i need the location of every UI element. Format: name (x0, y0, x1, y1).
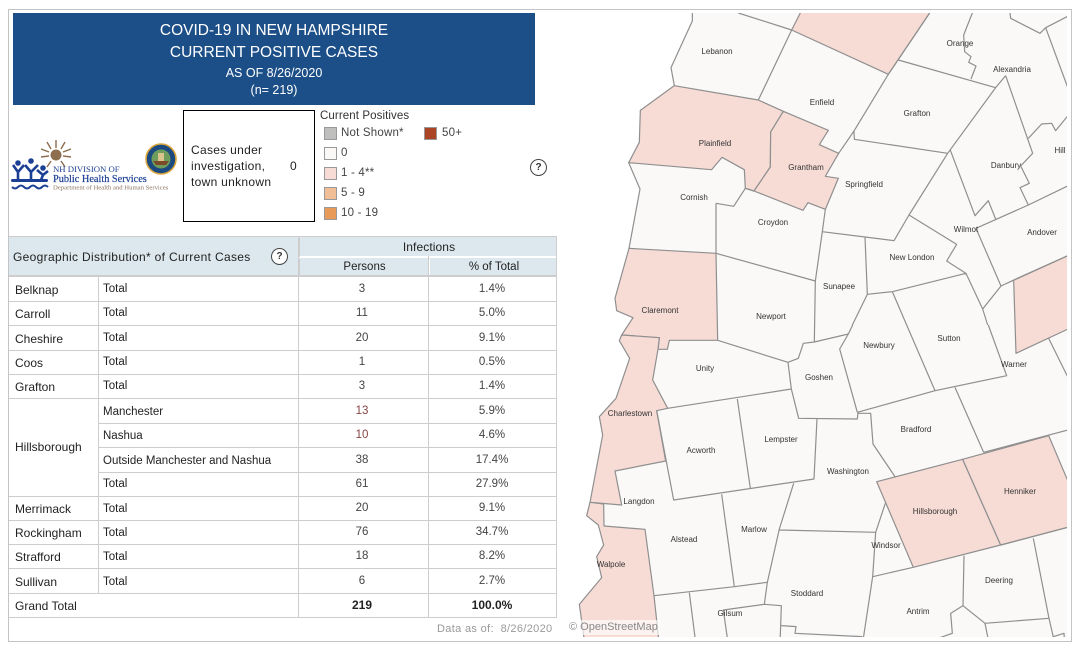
town labels: Andover (1027, 228, 1057, 237)
row: Cheshire (9, 326, 557, 351)
legend: current positives (320, 110, 462, 220)
town labels: Henniker (1004, 487, 1036, 496)
help icon: legend: ? (535, 162, 542, 173)
row: Grafton: Total (103, 380, 127, 392)
row: Grand Total (9, 593, 557, 618)
table header: ? (276, 251, 283, 262)
row: Merrimack: Total (103, 503, 127, 515)
title banner: COVID-19 IN NEW HAMPSHIRE (160, 22, 388, 39)
town labels: Grafton (904, 109, 930, 118)
row: Belknap: Total (103, 283, 127, 295)
town labels: Goshen (805, 373, 833, 382)
row: Cheshire: Cheshire (15, 332, 63, 346)
legend: current positives: 10 - 19 (341, 207, 378, 219)
row: Sullivan (9, 569, 557, 594)
row: Carroll: 5.0% (479, 307, 505, 319)
row: Grand Total: 100.0% (472, 598, 512, 612)
cases under investigation box: 0 (290, 159, 297, 173)
row: Sullivan: Total (103, 576, 127, 588)
town labels: Washington (827, 467, 869, 476)
row: Strafford (9, 544, 557, 569)
row group: Hillsborough (9, 405, 556, 497)
row: Coos: Coos (15, 356, 43, 370)
help icon: legend (530, 159, 547, 176)
town labels: Grantham (788, 163, 824, 172)
town labels: Claremont (642, 306, 679, 315)
legend: current positives: 1 - 4** (341, 167, 374, 179)
row: Rockingham (9, 520, 557, 545)
row: Strafford: 18 (356, 550, 368, 562)
town labels: Alexandria (993, 65, 1031, 74)
logo: NH Division of Public Health Services: Public Health Services (53, 174, 147, 185)
town polygons (579, 5, 1080, 650)
town labels: Deering (985, 576, 1013, 585)
row: Belknap: Belknap (15, 283, 58, 297)
town labels: Walpole (597, 560, 626, 569)
town labels: Antrim (906, 607, 930, 616)
legend: current positives: 0 (341, 147, 348, 159)
row: Rockingham: 34.7% (476, 526, 508, 538)
town labels: Acworth (687, 446, 715, 455)
row: Sullivan: 2.7% (479, 575, 505, 587)
cases under investigation box: town unknown (191, 175, 271, 189)
row group: Hillsborough: Nashua (103, 430, 143, 442)
row: Cheshire: 9.1% (479, 332, 505, 344)
title banner: CURRENT POSITIVE CASES (170, 44, 378, 61)
town labels: Sutton (937, 334, 961, 343)
row group: Hillsborough: 38 (356, 454, 368, 466)
logo: NH Division of Public Health Services: Department of Health and Human Services (53, 184, 169, 192)
row group: Hillsborough: 13 (356, 405, 368, 417)
row: Cheshire: 20 (356, 332, 368, 344)
town labels: Alstead (671, 535, 697, 544)
row: Rockingham: Rockingham (15, 526, 82, 540)
town labels: New London (890, 253, 934, 262)
town labels: Lebanon (701, 47, 733, 56)
OpenStreetMap credit: © OpenStreetMap (569, 621, 658, 633)
row: Grafton: Grafton (15, 380, 55, 394)
town labels: Cornish (680, 193, 708, 202)
row: Grafton (9, 374, 557, 399)
town labels: Gilsum (718, 609, 743, 618)
map of towns (578, 13, 1067, 637)
table header: Infections (403, 240, 455, 254)
table: geographic distribution (9, 236, 557, 618)
row: Carroll: Total (103, 307, 127, 319)
row group: Hillsborough: 27.9% (476, 478, 508, 490)
town labels: Langdon (623, 497, 655, 506)
town labels: Plainfield (699, 139, 731, 148)
row: Sullivan: 6 (359, 575, 365, 587)
town labels: Windsor (871, 541, 901, 550)
table header: % of Total (469, 261, 519, 273)
row: Coos: 0.5% (479, 356, 505, 368)
row: Grand Total: 219 (352, 598, 372, 612)
data date note: Data as of: 8/26/2020 (437, 623, 553, 635)
logo: NH Division of Public Health Services (11, 140, 177, 192)
row: Rockingham: 76 (356, 526, 368, 538)
row: Cheshire: Total (103, 332, 127, 344)
row: Belknap: 3 (359, 283, 365, 295)
row: Merrimack: 20 (356, 502, 368, 514)
title banner: AS OF 8/26/2020 (226, 66, 322, 80)
row group: Hillsborough: Manchester (103, 406, 163, 418)
title banner (13, 13, 535, 105)
cases under investigation box: Cases under (191, 143, 262, 157)
town labels: Wilmot (954, 225, 979, 234)
town labels: Orange (947, 39, 974, 48)
town labels: Newport (756, 312, 787, 321)
town labels (597, 39, 1066, 618)
row: Merrimack: Merrimack (15, 502, 71, 516)
row: Belknap (9, 277, 557, 302)
legend: current positives: Not Shown* (341, 127, 404, 139)
row group: Hillsborough: 5.9% (479, 405, 505, 417)
row: Grand Total: Grand Total (15, 599, 77, 613)
town labels: Newbury (863, 341, 895, 350)
town labels: Bradford (901, 425, 931, 434)
row: Carroll (9, 301, 557, 326)
legend: current positives: 50+ (442, 127, 462, 139)
logo: NH Division of Public Health Services: NH DIVISION OF (53, 164, 120, 174)
row: Grafton: 1.4% (479, 380, 505, 392)
town labels: Springfield (845, 180, 883, 189)
legend: current positives: Current Positives (320, 110, 409, 122)
table header (9, 236, 557, 276)
row group: Hillsborough: Outside Manchester and Nashua (103, 455, 271, 467)
town labels: Unity (696, 364, 714, 373)
row: Sullivan: Sullivan (15, 575, 57, 589)
title banner: (n= 219) (251, 83, 297, 97)
row: Strafford: Strafford (15, 550, 61, 564)
town labels: Hill (1054, 146, 1066, 155)
row: Coos: 1 (359, 356, 365, 368)
town labels: Sunapee (823, 282, 856, 291)
town labels: Hillsborough (913, 507, 957, 516)
town labels: Croydon (758, 218, 788, 227)
row group: Hillsborough: 10 (356, 429, 368, 441)
row group: Hillsborough: Total (103, 478, 127, 490)
row: Coos (9, 350, 557, 375)
legend: current positives: 5 - 9 (341, 187, 365, 199)
row group: Hillsborough: 4.6% (479, 429, 505, 441)
row: Grafton: 3 (359, 380, 365, 392)
town labels: Marlow (741, 525, 767, 534)
table header: Persons (343, 261, 386, 273)
row: Merrimack (9, 496, 557, 521)
row: Strafford: 8.2% (479, 550, 505, 562)
table header: Geographic Distribution* of Current Cases (13, 250, 251, 264)
town labels: Enfield (810, 98, 834, 107)
row: Rockingham: Total (103, 527, 127, 539)
row: Carroll: Carroll (15, 307, 50, 321)
row group: Hillsborough: 17.4% (476, 454, 508, 466)
town labels: Charlestown (608, 409, 652, 418)
town labels: Warner (1001, 360, 1027, 369)
row: Merrimack: 9.1% (479, 502, 505, 514)
row: Belknap: 1.4% (479, 283, 505, 295)
row: Strafford: Total (103, 551, 127, 563)
town labels: Stoddard (791, 589, 823, 598)
cases under investigation box: investigation, (191, 159, 265, 173)
row: Coos: Total (103, 356, 127, 368)
row group: Hillsborough: Hillsborough (15, 440, 82, 454)
row: Carroll: 11 (356, 307, 368, 319)
cases under investigation box (183, 110, 315, 222)
row group: Hillsborough: 61 (356, 478, 368, 490)
town labels: Lempster (764, 435, 798, 444)
town labels: Danbury (991, 161, 1021, 170)
